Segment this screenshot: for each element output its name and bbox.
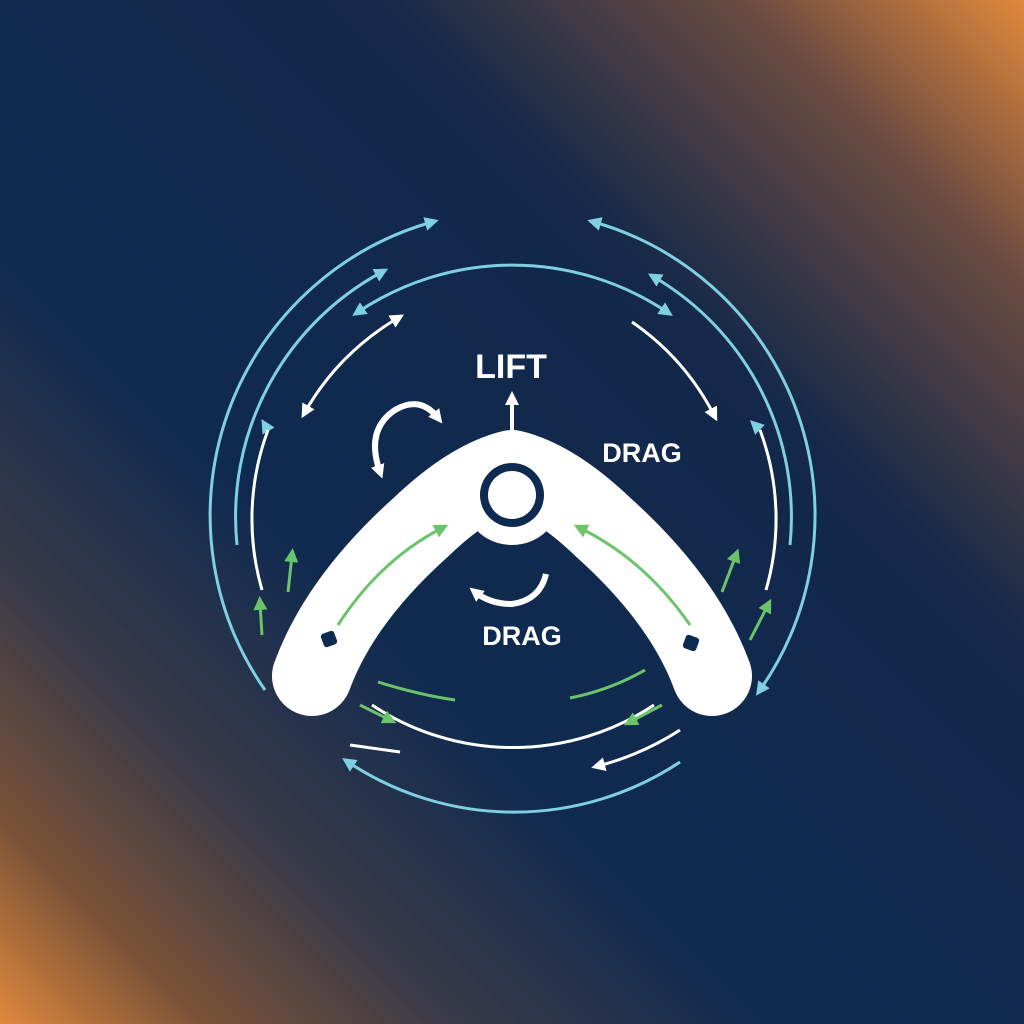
lift arrow bbox=[510, 398, 514, 440]
rotation arrow bbox=[375, 404, 438, 472]
green flow arrows bbox=[260, 555, 768, 722]
label: lift: LIFT bbox=[475, 348, 547, 386]
label: drag right: DRAG bbox=[602, 438, 682, 468]
white arcs bbox=[252, 318, 776, 766]
drag swirl arrow bbox=[475, 574, 546, 604]
boomerang bbox=[312, 445, 712, 676]
outer cyan arcs bbox=[210, 222, 815, 812]
label: drag bottom: DRAG bbox=[482, 621, 562, 651]
